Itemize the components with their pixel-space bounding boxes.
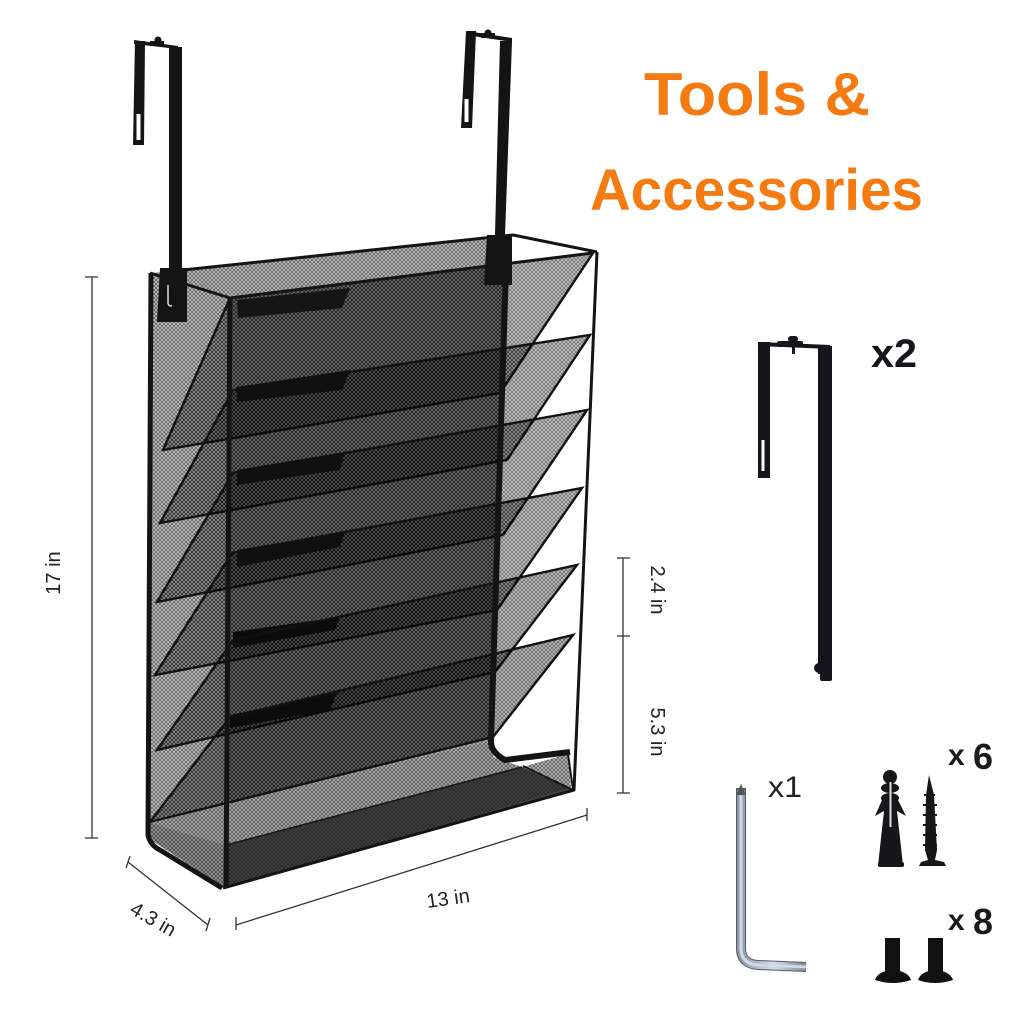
tray 1 bbox=[163, 253, 593, 450]
label: x 6: 6 bbox=[973, 736, 993, 777]
dimension: 5.3 in: 5.3 in bbox=[646, 708, 668, 756]
dimension: 13 in bbox=[236, 808, 587, 930]
tray 4 bbox=[155, 488, 582, 675]
dimension: 4.3 in: 4.3 in bbox=[126, 898, 180, 942]
dimension: 2.4 in bbox=[617, 558, 668, 636]
label: x 8 bbox=[948, 901, 993, 942]
icon: machine bolts bbox=[875, 938, 953, 983]
icon: over-door hook accessory bbox=[758, 336, 832, 681]
right over-door hook bbox=[461, 30, 512, 285]
label: x2: x2 bbox=[871, 332, 917, 376]
left over-door hook bbox=[133, 36, 187, 322]
title: Tools & bbox=[644, 61, 870, 128]
back wall mesh bbox=[150, 235, 507, 822]
icon: wall screw bbox=[919, 775, 946, 866]
mesh wall organizer bbox=[148, 235, 597, 888]
label: x1: x1 bbox=[768, 771, 802, 804]
metal frame bbox=[148, 235, 597, 888]
bottom tray bbox=[148, 740, 572, 888]
dimension: 4.3 in bbox=[126, 856, 210, 942]
title: Accessories bbox=[590, 158, 923, 223]
dimension: 13 in: 13 in bbox=[425, 885, 471, 913]
tray 5 bbox=[157, 565, 577, 750]
label: x 8: x bbox=[948, 904, 965, 937]
title bbox=[590, 61, 923, 223]
label: x 6: x bbox=[948, 739, 965, 772]
label: x 8: 8 bbox=[973, 901, 993, 942]
icon: hex key bbox=[736, 784, 806, 967]
tray 3 bbox=[157, 410, 587, 602]
dimension: 17 in bbox=[43, 277, 98, 838]
dimension: 17 in: 17 in bbox=[43, 551, 65, 595]
icon: wall anchor bbox=[875, 770, 906, 867]
tray 2 bbox=[160, 335, 590, 523]
tray 6 bbox=[150, 635, 573, 822]
dimension: 2.4 in: 2.4 in bbox=[646, 566, 668, 614]
dimension: 5.3 in bbox=[617, 636, 668, 793]
label: x 6 bbox=[948, 736, 993, 777]
